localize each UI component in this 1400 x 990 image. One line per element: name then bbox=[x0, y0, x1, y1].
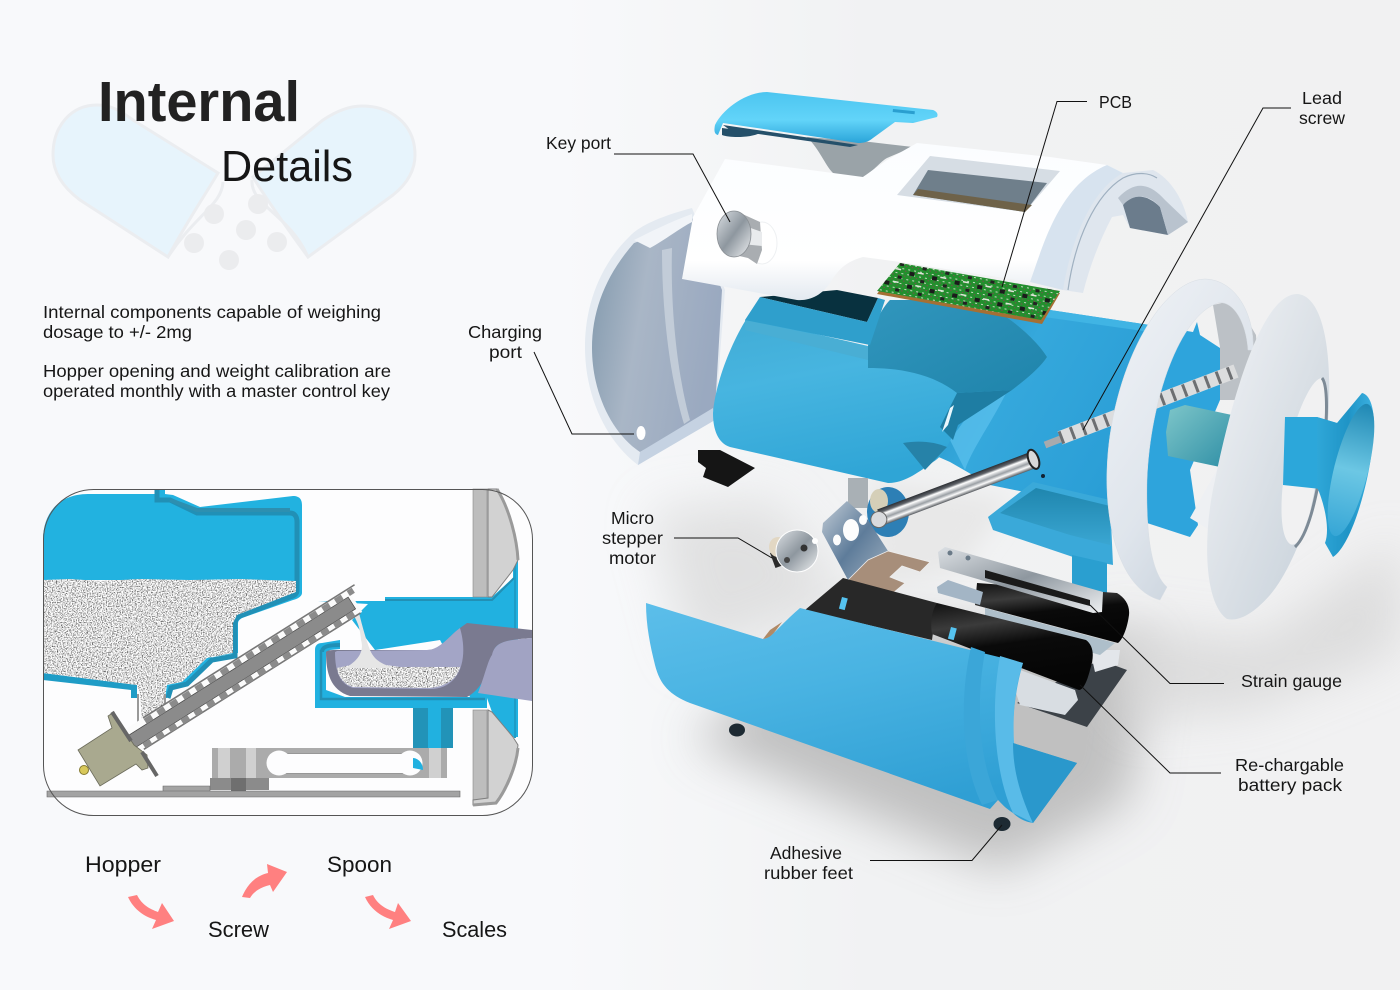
leader and label: PCB: PCB bbox=[1099, 92, 1132, 112]
load cell render bbox=[937, 547, 1103, 613]
leader and label: Re-chargable battery pack: battery pack bbox=[1238, 775, 1342, 795]
panel: cross-section diagram bbox=[43, 489, 532, 816]
leader and label: Re-chargable battery pack: Re-chargable bbox=[1235, 755, 1344, 775]
key port barrel bbox=[717, 211, 777, 264]
lead screw bbox=[1045, 371, 1236, 445]
hopper body bbox=[43, 489, 302, 698]
scoop bbox=[326, 609, 532, 701]
leader and label: Micro stepper motor: Micro bbox=[611, 508, 654, 528]
description: calibration: Hopper opening and weight calibration are bbox=[43, 361, 391, 381]
flow label: Scales: Scales bbox=[442, 917, 507, 942]
leader and label: Charging port: port bbox=[489, 342, 522, 362]
leader and label: Lead screw: screw bbox=[1299, 108, 1346, 128]
hopper bbox=[713, 290, 1047, 483]
top lid bbox=[714, 92, 938, 147]
leader and label: Re-chargable battery pack bbox=[1080, 685, 1344, 795]
main blue tube bbox=[900, 300, 1220, 537]
powder in hopper bbox=[43, 579, 296, 720]
leader and label: Charging port: Charging bbox=[468, 322, 542, 342]
leader and label: Micro stepper motor bbox=[602, 508, 772, 568]
flow arrow: hopper to screw bbox=[128, 895, 174, 929]
description: weighing accuracy: Internal components capable of weighing bbox=[43, 302, 381, 322]
flow label: Spoon: Spoon bbox=[327, 852, 392, 877]
leader and label: Adhesive rubber feet: Adhesive bbox=[770, 843, 842, 863]
teal cylinder bbox=[1166, 405, 1232, 467]
base floor bbox=[47, 786, 460, 797]
background drop shadows bbox=[650, 480, 1400, 870]
bottom blue shell bbox=[646, 603, 1077, 823]
leader and label: Charging port bbox=[468, 322, 634, 434]
decorative capsule logo bbox=[53, 105, 415, 270]
flow arrow: spoon to scales bbox=[365, 895, 411, 929]
ring inner back bbox=[1213, 300, 1260, 400]
connector block bbox=[698, 450, 755, 487]
end cap section bbox=[473, 489, 518, 805]
dark electronics tray bbox=[805, 578, 937, 640]
auger screw tube bbox=[113, 585, 369, 760]
description: calibration bbox=[43, 361, 391, 401]
bracket pin and disc bbox=[848, 478, 909, 537]
white battery holders bbox=[1015, 650, 1120, 715]
rubber foot left bbox=[729, 724, 745, 736]
rubber foot right bbox=[994, 817, 1010, 831]
stepper motor bbox=[78, 712, 157, 786]
leader and label: Strain gauge bbox=[1090, 605, 1342, 691]
render: exploded device bbox=[585, 92, 1384, 831]
description: weighing accuracy: dosage to +/- 2mg bbox=[43, 322, 192, 342]
lower tray bbox=[988, 474, 1113, 593]
leader and label: Micro stepper motor: motor bbox=[609, 548, 656, 568]
stepper motor render bbox=[769, 530, 818, 572]
spout walls bbox=[138, 694, 165, 725]
flow arrow: screw to spoon bbox=[242, 864, 287, 898]
rounded frame bbox=[44, 490, 532, 816]
description: calibration: operated monthly with a master control key bbox=[43, 381, 390, 401]
leader and label: Lead screw bbox=[1083, 88, 1346, 430]
shell end arch bbox=[1063, 170, 1188, 293]
front battery bbox=[839, 597, 1093, 690]
white slider bbox=[1190, 470, 1220, 530]
white upper shell bbox=[682, 143, 1123, 300]
outlet bowl housing bbox=[315, 560, 518, 748]
leader and label: Adhesive rubber feet: rubber feet bbox=[764, 863, 853, 883]
PCB bbox=[877, 263, 1060, 324]
rear left cap bbox=[585, 208, 725, 465]
load cell scales bbox=[210, 748, 447, 791]
large disc bbox=[1207, 294, 1329, 620]
leader and label: Adhesive rubber feet bbox=[764, 825, 1002, 883]
funnel bbox=[1283, 393, 1384, 557]
base plate bbox=[1017, 660, 1127, 727]
shell window bbox=[897, 156, 1060, 212]
leader and label: Key port: Key port bbox=[546, 133, 611, 153]
title: Internal: Internal bbox=[98, 70, 300, 134]
leader and label: Lead screw: Lead bbox=[1302, 88, 1342, 108]
leader and label: Key port bbox=[546, 133, 730, 222]
inner lid recess bbox=[807, 137, 913, 178]
flow label: Screw: Screw bbox=[208, 917, 269, 942]
leader and label: PCB bbox=[1002, 92, 1132, 287]
chrome rod bbox=[867, 448, 1042, 530]
rear battery bbox=[975, 583, 1129, 643]
motor bracket bbox=[822, 501, 930, 593]
leader and label: Micro stepper motor: stepper bbox=[602, 528, 663, 548]
title: Details: Details bbox=[221, 142, 353, 191]
flow label: Hopper: Hopper bbox=[85, 852, 161, 877]
leader and label: Strain gauge: Strain gauge bbox=[1241, 671, 1342, 691]
silver strip between batteries bbox=[985, 608, 1115, 655]
front ring bbox=[1107, 279, 1253, 600]
description: weighing accuracy bbox=[43, 302, 381, 342]
